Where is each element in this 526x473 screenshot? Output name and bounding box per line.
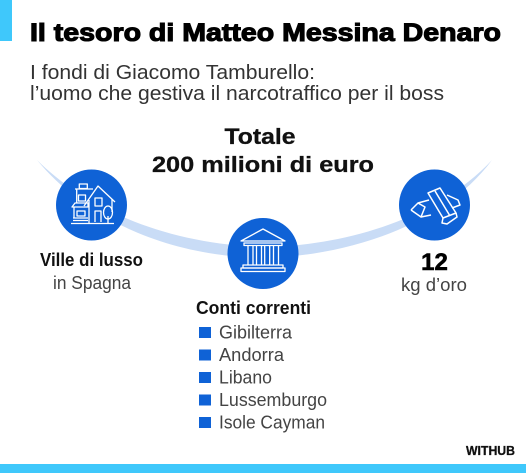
label: luxury villas: Ville di lusso	[40, 249, 143, 270]
list items	[219, 322, 327, 432]
label: luxury villas: in Spagna	[53, 273, 132, 293]
total heading: 200 milioni di euro	[152, 152, 374, 177]
list items: Isole Cayman	[219, 412, 325, 432]
subtitle: I fondi di Giacomo Tamburello:	[30, 61, 315, 84]
top-left accent bar	[0, 0, 12, 41]
label: luxury villas	[40, 249, 143, 293]
curved connector	[37, 160, 492, 258]
list items: Andorra	[219, 345, 285, 365]
icon: bank	[228, 218, 298, 289]
icon: house	[56, 170, 127, 240]
subtitle	[30, 61, 444, 105]
list items: Lussemburgo	[219, 390, 327, 410]
bottom accent bar	[0, 464, 526, 473]
label: gold amount: kg d’oro	[401, 275, 467, 295]
list heading: Conti correnti	[196, 297, 311, 318]
list items: Libano	[219, 368, 272, 388]
list bullets	[199, 327, 211, 428]
subtitle: l’uomo che gestiva il narcotraffico per il boss	[30, 82, 444, 105]
current accounts list	[196, 297, 327, 432]
list items: Gibilterra	[219, 322, 293, 342]
total heading: Totale	[224, 124, 296, 149]
label: gold amount	[401, 249, 467, 295]
icon: gold bars	[399, 170, 470, 240]
title: Il tesoro di Matteo Messina Denaro	[30, 19, 501, 47]
total heading	[152, 124, 374, 177]
label: gold amount: 12	[421, 249, 448, 276]
brand logo text: WITHUB	[466, 444, 515, 458]
